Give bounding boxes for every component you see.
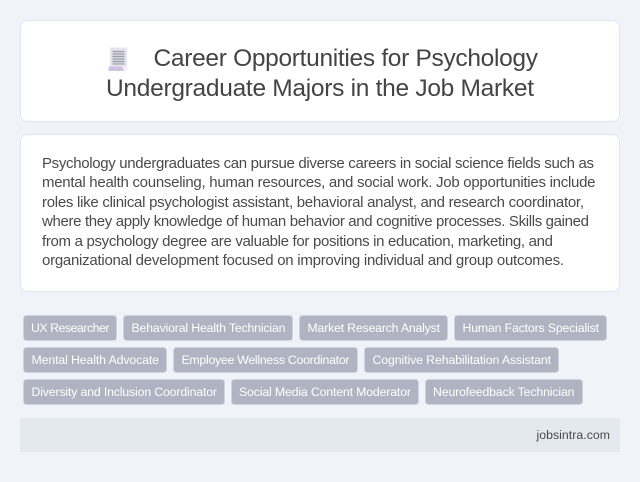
text block: description: from a psychology degree are valuable for positions in education, marketing, and — [42, 233, 553, 250]
tag: Neurofeedback Technician — [426, 380, 582, 404]
title — [106, 45, 539, 102]
panel: description — [20, 134, 620, 292]
footer source text: jobsintra.com — [536, 428, 610, 442]
tag: Behavioral Health Technician — [124, 316, 292, 340]
text block: description: organizational development focused on improving individual and group outcomes. — [42, 252, 564, 269]
text block: description — [41, 155, 596, 269]
tag: Mental Health Advocate: Mental Health Advocate — [32, 353, 159, 367]
title: Undergraduate Majors in the Job Market — [106, 75, 534, 102]
tag: Social Media Content Moderator: Social Media Content Moderator — [239, 385, 411, 399]
panel: title card — [20, 20, 620, 122]
footer — [20, 418, 620, 452]
tag: UX Researcher: UX Researcher — [31, 321, 110, 335]
tag: Human Factors Specialist: Human Factors Specialist — [462, 321, 600, 335]
title: Career Opportunities for Psychology — [154, 45, 539, 72]
tag: Employee Wellness Coordinator: Employee Wellness Coordinator — [182, 353, 350, 367]
tag: UX Researcher — [24, 316, 116, 340]
tag: Market Research Analyst: Market Research Analyst — [308, 321, 441, 335]
tag: Mental Health Advocate — [24, 348, 166, 372]
tag: Human Factors Specialist — [454, 316, 606, 340]
tag: Cognitive Rehabilitation Assistant: Cognitive Rehabilitation Assistant — [372, 353, 552, 367]
text block: description: roles like clinical psychologist assistant, behavioral analyst, and research coordinator, — [42, 194, 584, 211]
tag: Market Research Analyst — [300, 316, 448, 340]
tag: Social Media Content Moderator — [232, 380, 418, 404]
tag: Neurofeedback Technician: Neurofeedback Technician — [433, 385, 575, 399]
tag: Behavioral Health Technician: Behavioral Health Technician — [132, 321, 286, 335]
text block: description: where they apply knowledge of human behavior and cognitive processes. Skills gained — [41, 213, 589, 230]
tag list — [24, 316, 606, 404]
tag: Diversity and Inclusion Coordinator — [24, 380, 224, 404]
tag: Cognitive Rehabilitation Assistant — [364, 348, 558, 372]
tag: Employee Wellness Coordinator — [174, 348, 358, 372]
icon: document scroll — [108, 48, 127, 71]
text block: description: Psychology undergraduates can pursue diverse careers in social science fields such as — [42, 155, 594, 172]
text block: description: mental health counseling, human resources, and social work. Job opportunities include — [42, 174, 596, 191]
tag: Diversity and Inclusion Coordinator: Diversity and Inclusion Coordinator — [32, 385, 217, 399]
